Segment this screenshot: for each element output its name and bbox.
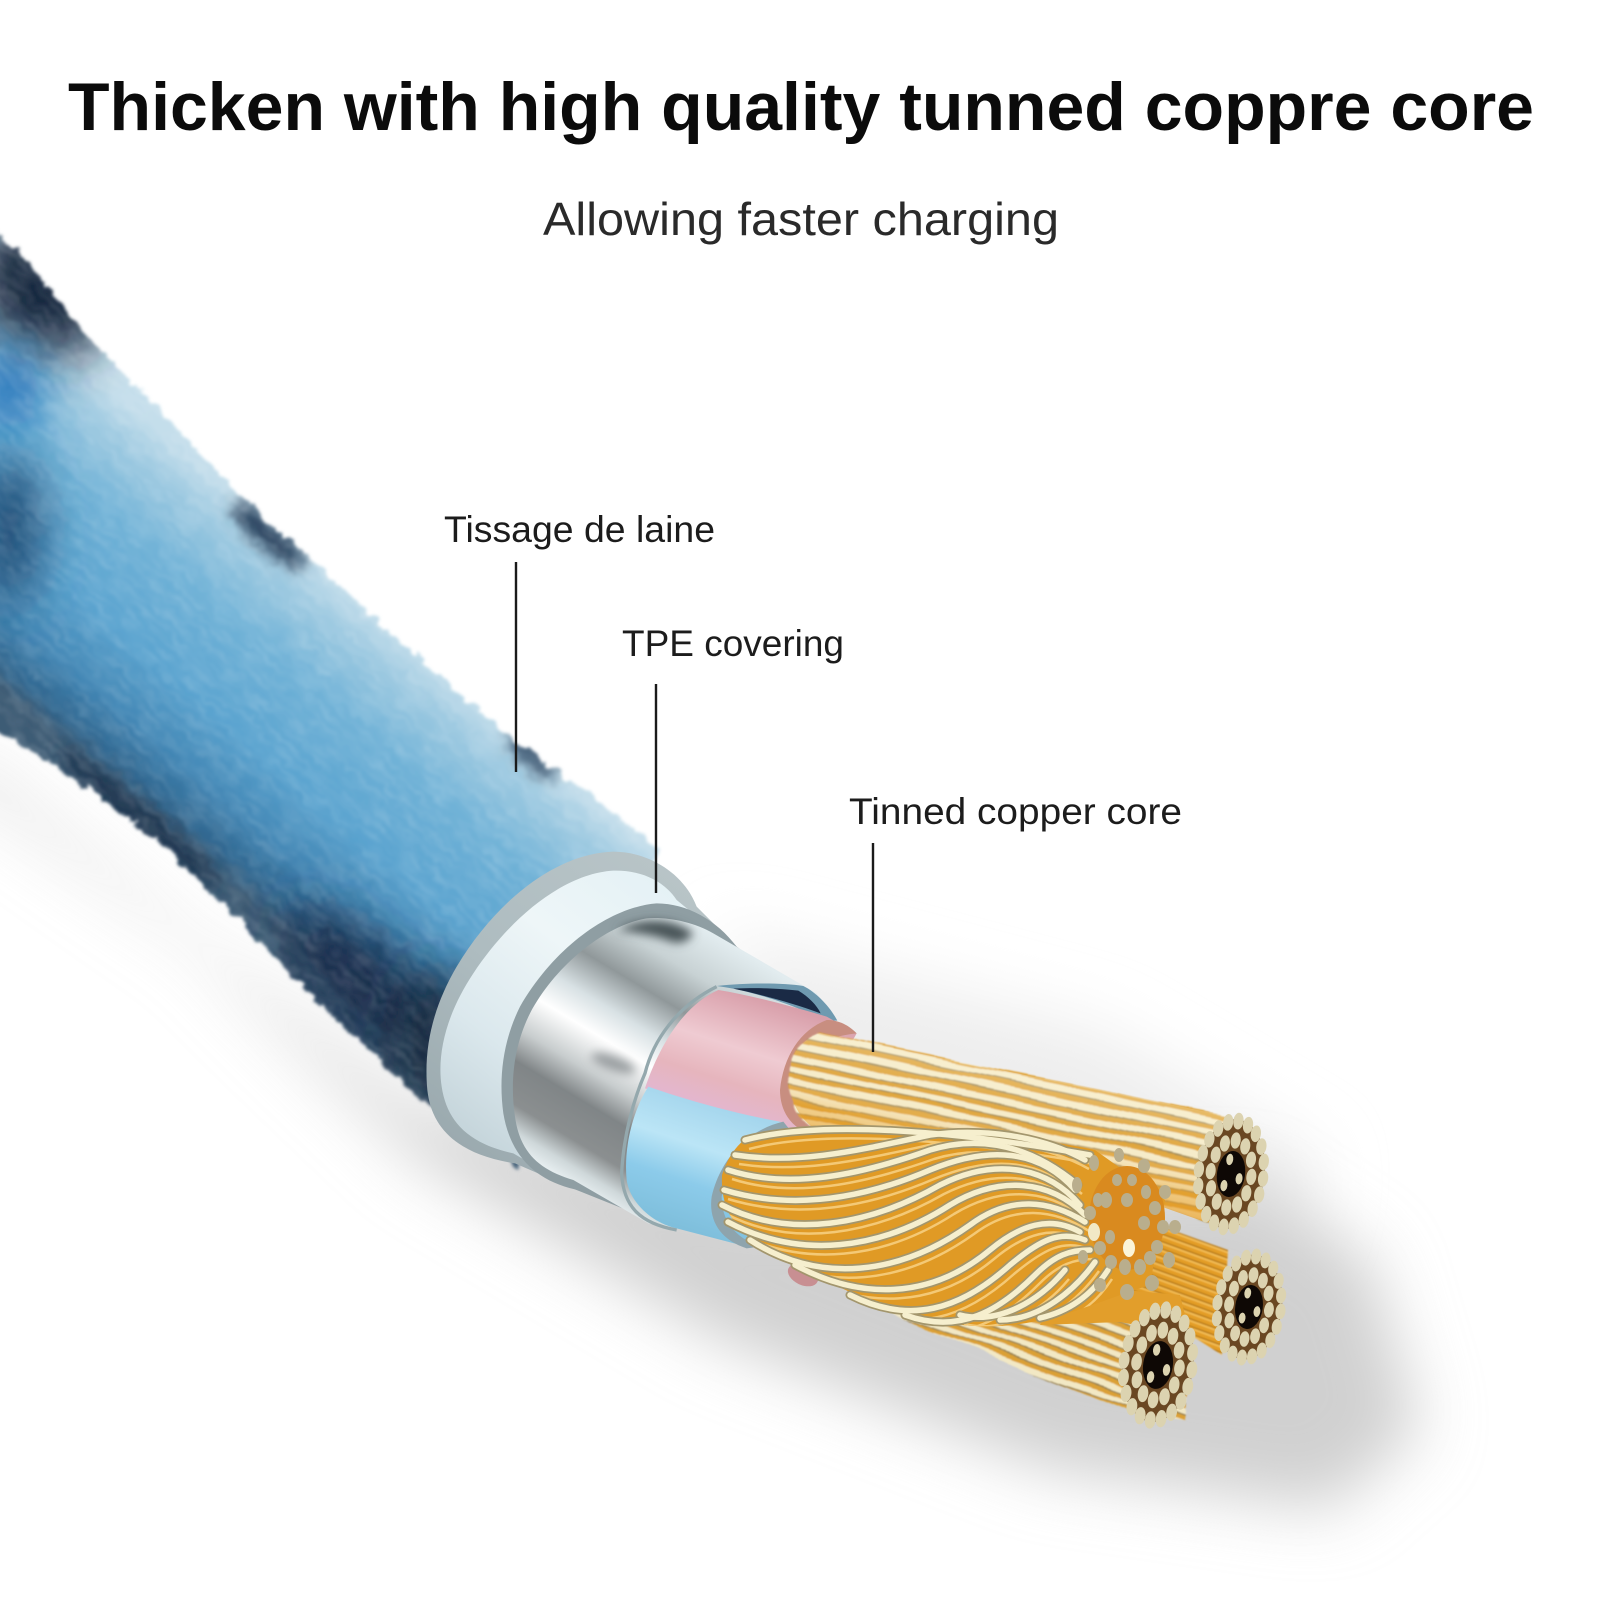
flared core interior [1089, 1166, 1165, 1270]
fabric braided sleeve [0, 232, 661, 1172]
callout: Tissage de laine: Tissage de laine [444, 509, 715, 550]
blue wire end ring [711, 1122, 790, 1248]
copper strands: upper bundle [789, 1033, 1277, 1240]
cable drop shadow [0, 745, 1420, 1510]
silver foil tube [513, 918, 833, 1230]
right strand end cap [1204, 1243, 1294, 1371]
copper strands: right orange bundle [1120, 1215, 1294, 1371]
copper strands: lower bundle [822, 1272, 1206, 1434]
pink insulated wire [645, 990, 857, 1133]
callout: TPE covering: TPE covering [622, 623, 844, 664]
title: Thicken with high quality tunned coppre core [68, 69, 1534, 145]
connector assembly: insulation ring and foil [426, 852, 857, 1248]
soft halo above copper core [720, 930, 1320, 1250]
inner grey rim [501, 903, 833, 1230]
pink wire end ring [780, 1020, 857, 1135]
TPE white band [440, 871, 733, 1190]
upper strand end cap [1185, 1108, 1277, 1240]
foil open back [717, 983, 837, 1021]
subtitle: Allowing faster charging [543, 193, 1059, 245]
foil shadow fold [589, 1048, 638, 1078]
callout: Tinned copper core: Tinned copper core [849, 791, 1182, 832]
copper strands: central twisted bundle [722, 1128, 1181, 1331]
foil dark crease [617, 920, 693, 943]
flared strand ends [1072, 1148, 1181, 1300]
orange gap fill [1040, 1285, 1190, 1335]
pink wire underside [784, 1259, 822, 1291]
dark cavity [733, 988, 821, 1013]
blue insulated wire [626, 1087, 797, 1247]
foil lip [622, 987, 717, 1230]
TPE outer flange [426, 852, 737, 1190]
lower strand end cap [1110, 1296, 1206, 1434]
